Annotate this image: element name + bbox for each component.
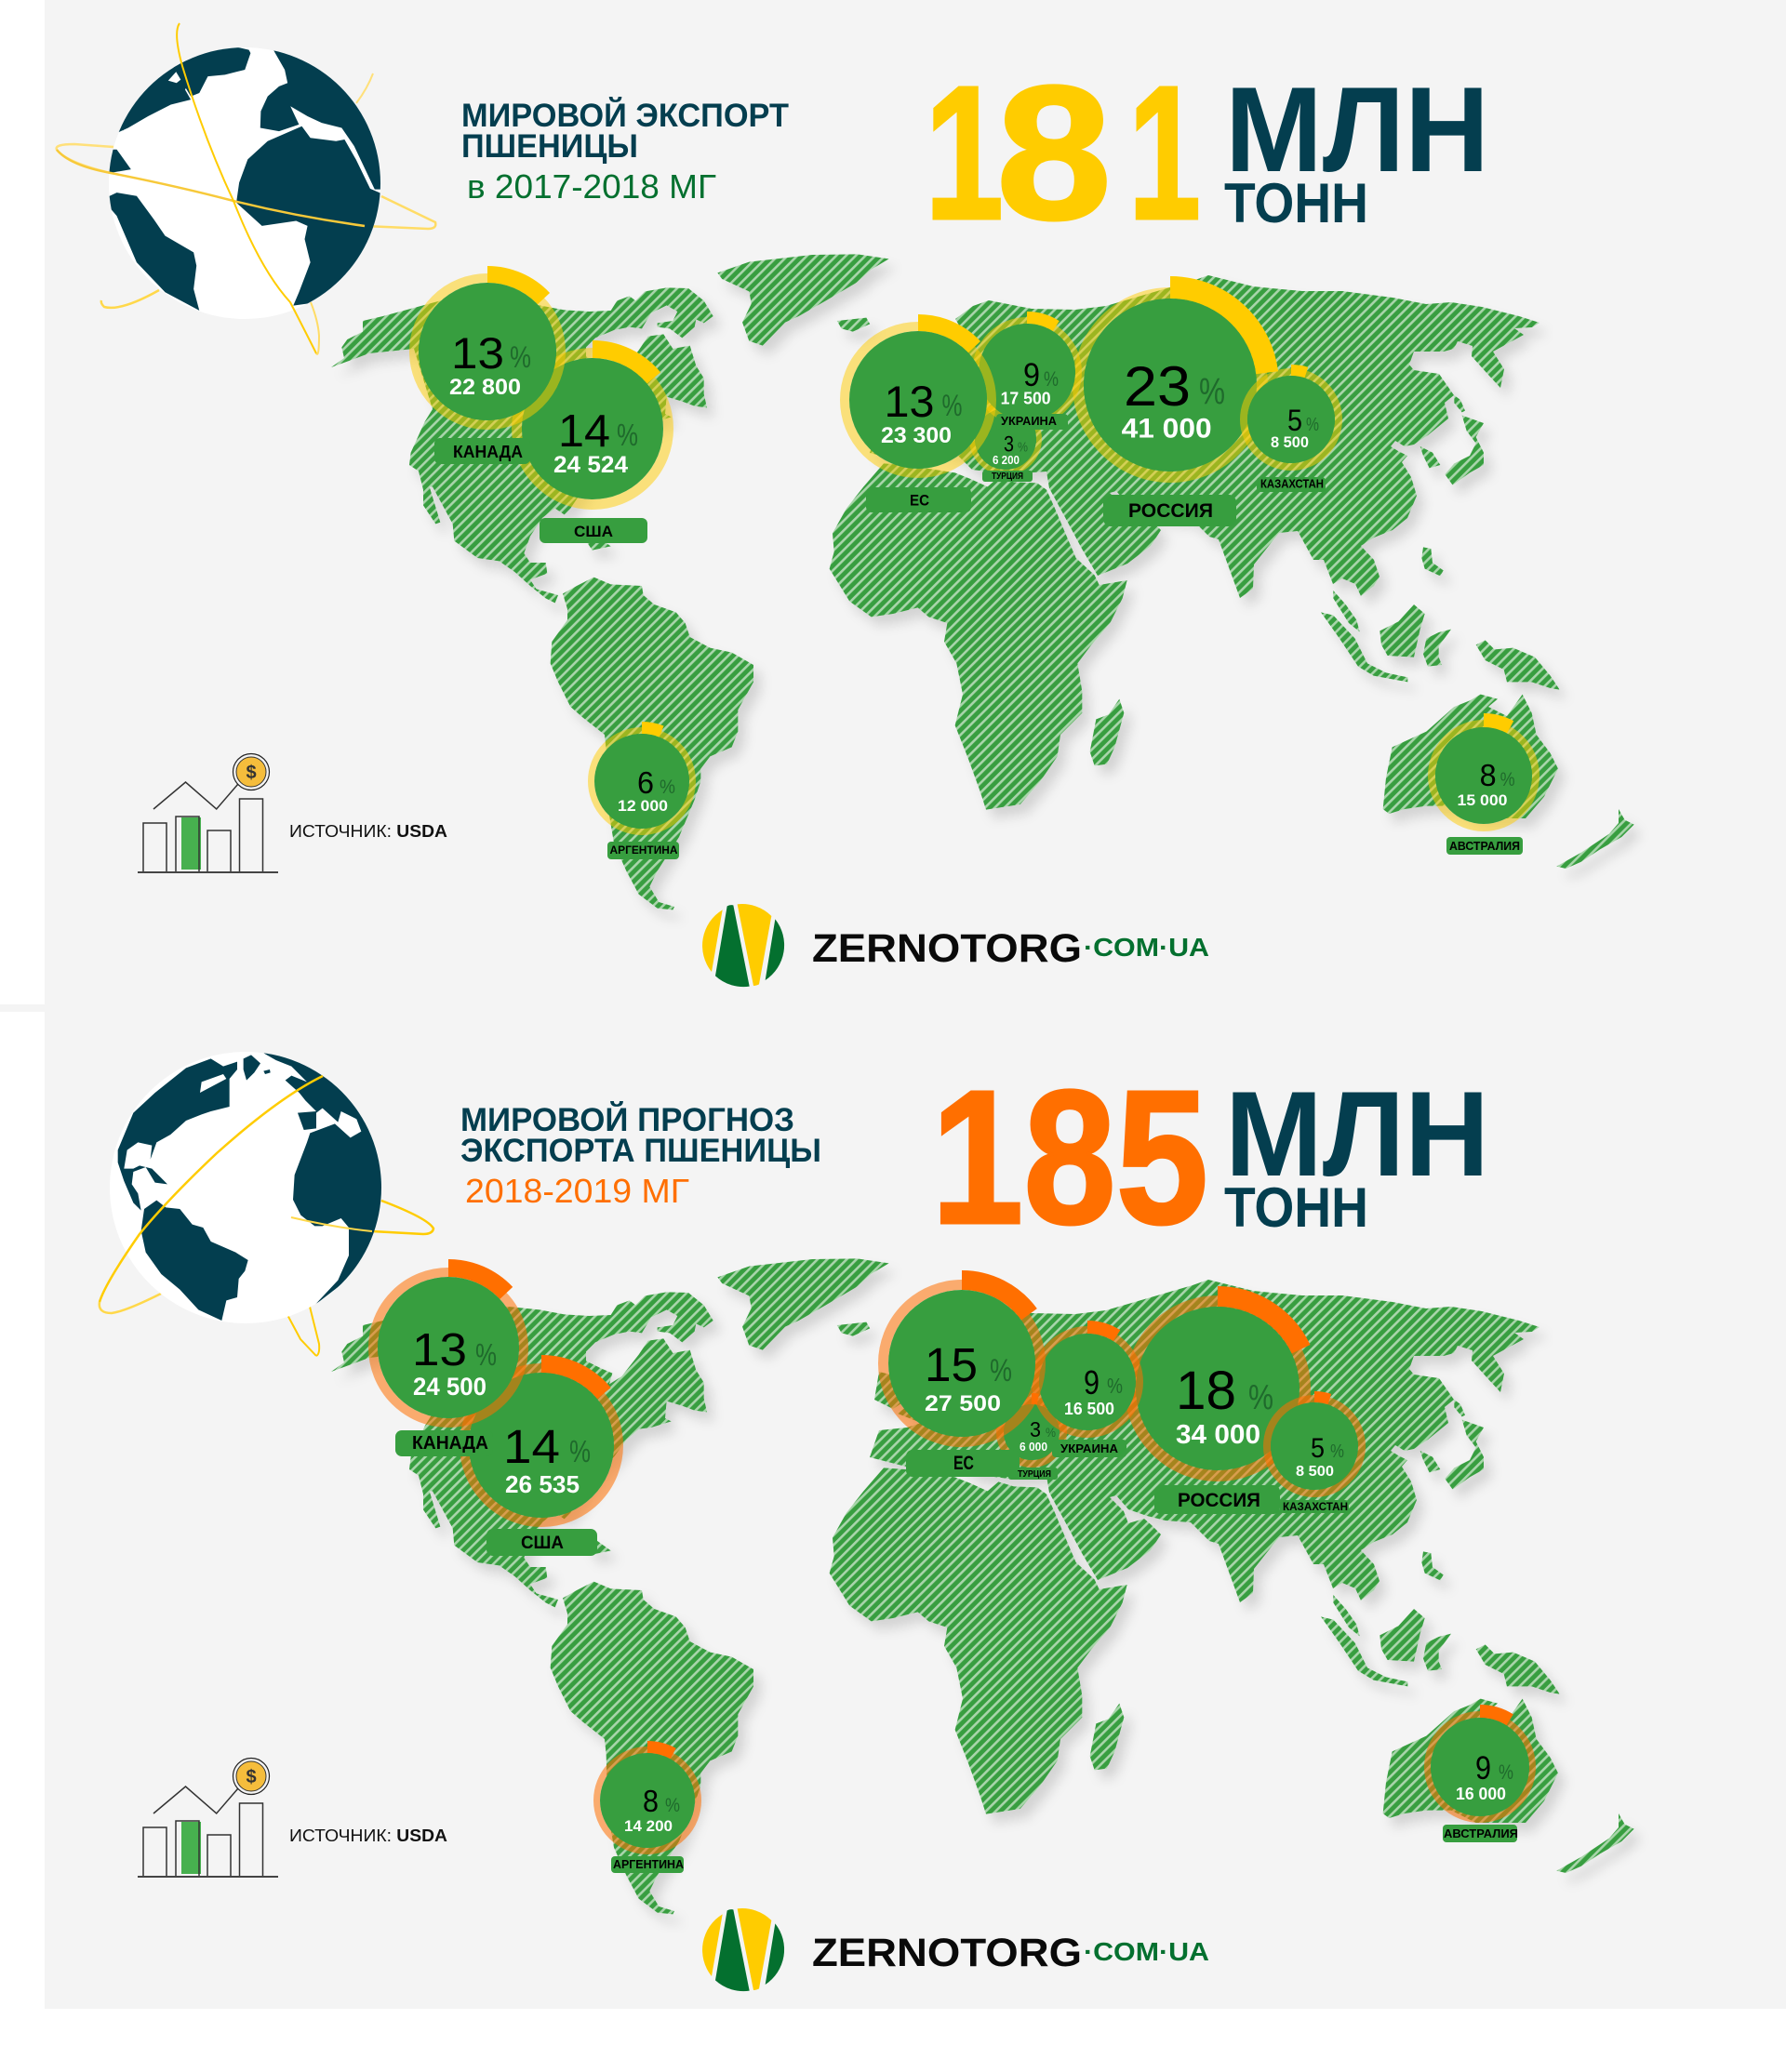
bubble: Украина 2018 — [1033, 1327, 1142, 1457]
bubble: Казахстан 2018: 8 500 — [1296, 1464, 1334, 1480]
bubble: Австралия 2018 — [1424, 1711, 1536, 1842]
headline number, top panel: МЛН — [1225, 61, 1489, 197]
bubble: Казахстан 2017: 8 500 — [1271, 433, 1309, 451]
bubble: ЕС 2017 — [841, 323, 995, 512]
bubble: Австралия 2018: % — [1499, 1760, 1513, 1784]
bubble: Турция 2017: ТУРЦИЯ — [992, 472, 1023, 482]
bubble: Турция 2017: 3 — [1004, 432, 1014, 458]
bubble: Турция 2017 — [969, 404, 1042, 482]
bubble: Австралия 2017: 15 000 — [1457, 791, 1507, 809]
title, top panel: в 2017-2018 МГ — [467, 167, 716, 206]
bubble: Аргентина 2018 — [593, 1747, 701, 1873]
bubble: Украина 2018: 9 — [1084, 1363, 1100, 1401]
bubble: Канада 2018: % — [475, 1337, 497, 1372]
bubble: Россия 2017: 23 — [1124, 355, 1191, 418]
bubble: Австралия 2017 — [1429, 720, 1539, 855]
bubble: Украина 2018: 16 500 — [1064, 1400, 1114, 1418]
headline number, top panel: ТОНН — [1224, 172, 1368, 234]
bubble: Казахстан 2018 — [1265, 1397, 1364, 1513]
bubble: Россия 2017: % — [1199, 372, 1225, 413]
logo wordmark — [812, 926, 1209, 971]
headline number, bottom panel: 185 — [931, 1051, 1208, 1264]
headline number, top panel — [925, 46, 1489, 259]
headline number, top panel: 1 — [1128, 46, 1201, 259]
bubble: Украина 2017: % — [1044, 367, 1059, 391]
bubble: США 2017 — [513, 350, 672, 543]
title, top panel — [461, 97, 789, 206]
source note, bottom panel: ИСТОЧНИК: USDA — [289, 1826, 447, 1845]
bubble: Казахстан 2017 — [1242, 370, 1340, 492]
bubble: Аргентина 2017 — [588, 727, 696, 859]
logo, bottom panel: ZERNOTORG — [812, 1931, 1082, 1975]
bubble: ЕС 2018: % — [990, 1353, 1012, 1388]
bubble: Украина 2017 — [973, 318, 1081, 430]
bubble: Австралия 2017: 8 — [1480, 758, 1497, 792]
bubble: Россия 2018: РОССИЯ — [1178, 1490, 1260, 1511]
label: Турция 2018: ТУРЦИЯ — [1018, 1468, 1051, 1480]
bubble: США 2017: 14 — [558, 406, 610, 457]
bubble: Канада 2018: КАНАДА — [412, 1433, 488, 1454]
bubble: Турция 2018: 3 — [1030, 1417, 1041, 1441]
bubble: США 2018: США — [521, 1534, 564, 1553]
logo, top panel — [702, 904, 1209, 987]
bubble: ЕС 2018 — [878, 1280, 1046, 1477]
bubble: Аргентина 2017: % — [660, 777, 675, 798]
bubble: Аргентина 2017: АРГЕНТИНА — [610, 843, 678, 857]
bubble: Украина 2017: 9 — [1023, 357, 1040, 393]
bubble: Канада 2017: 22 800 — [449, 375, 521, 400]
title, top panel: МИРОВОЙ ЭКСПОРТ — [461, 97, 789, 134]
icon: chart with coin, top panel — [138, 753, 278, 873]
bubble: США 2018: % — [569, 1434, 591, 1468]
bubble: США 2018: 26 535 — [505, 1470, 580, 1498]
bubble: Аргентина 2017: 12 000 — [618, 797, 668, 815]
headline number, top panel: 1 — [925, 46, 1004, 259]
bubble: Украина 2018: % — [1107, 1374, 1123, 1398]
bubble: Аргентина 2018: 14 200 — [624, 1817, 673, 1835]
bubble: ЕС 2018: 15 — [925, 1338, 978, 1391]
title, bottom panel: 2018-2019 МГ — [465, 1172, 689, 1210]
bubble: Казахстан 2018: 5 — [1311, 1433, 1325, 1464]
bubble: Аргентина 2018: 8 — [643, 1784, 659, 1818]
bubble: Канада 2017: КАНАДА — [453, 443, 523, 461]
title, bottom panel — [460, 1101, 821, 1210]
bubble: США 2017: % — [617, 418, 638, 452]
bubble: Казахстан 2017: 5 — [1287, 404, 1302, 437]
title, bottom panel: МИРОВОЙ ПРОГНОЗ — [460, 1101, 794, 1138]
bubble: США 2018 — [460, 1363, 623, 1556]
bubble: Россия 2018: 18 — [1176, 1361, 1236, 1421]
bubble: Казахстан 2018: % — [1330, 1441, 1344, 1462]
world map, bottom panel — [316, 1246, 1656, 1934]
bubble: Казахстан 2017: КАЗАХСТАН — [1260, 478, 1324, 491]
bubble: Аргентина 2018: % — [665, 1795, 680, 1816]
logo wordmark: ·COM·UA — [1084, 933, 1209, 962]
logo, bottom panel: ·COM·UA — [1084, 1937, 1209, 1966]
bubble: США 2017: США — [574, 523, 613, 540]
bubble: ЕС 2018: 27 500 — [925, 1391, 1001, 1416]
bubble: Канада 2018: 24 500 — [413, 1373, 486, 1401]
bubble: ЕС 2018: ЕС — [953, 1453, 974, 1474]
bubble: Россия 2018: % — [1248, 1378, 1273, 1417]
bubble: Россия 2017: РОССИЯ — [1128, 500, 1213, 522]
headline number, bottom panel: ТОНН — [1224, 1176, 1368, 1239]
bubble: ЕС 2017: ЕС — [910, 491, 929, 510]
bubble: Россия 2018: 34 000 — [1176, 1420, 1260, 1450]
bubble: Австралия 2017: % — [1500, 769, 1515, 790]
globe, top panel — [57, 23, 435, 354]
bubble: Россия 2017: 41 000 — [1122, 414, 1212, 445]
bubble: Австралия 2017: АВСТРАЛИЯ — [1449, 840, 1520, 853]
icon: chart with coin, bottom panel — [138, 1758, 278, 1878]
headline number, top panel: 8 — [996, 46, 1112, 259]
bubble: США 2018: 14 — [503, 1420, 560, 1473]
world map, top panel — [316, 242, 1656, 930]
bubble: Россия 2018 — [1126, 1296, 1310, 1514]
icon: chart with coin, top panel: $ — [246, 763, 257, 783]
bubble: Турция 2017: 6 200 — [993, 454, 1020, 467]
bubble: Украина 2017: УКРАИНА — [1001, 415, 1057, 428]
bubble: ЕС 2017: 23 300 — [881, 423, 952, 448]
bubble: Австралия 2018: 16 000 — [1456, 1785, 1506, 1803]
bubble: Канада 2017: 13 — [451, 328, 504, 378]
bubble: Аргентина 2017: 6 — [637, 765, 654, 800]
bubble: Канада 2018: 13 — [412, 1325, 467, 1375]
logo wordmark: ZERNOTORG — [812, 926, 1082, 971]
bubble: Аргентина 2018: АРГЕНТИНА — [613, 1858, 684, 1871]
bubble: Австралия 2018: АВСТРАЛИЯ — [1444, 1827, 1518, 1840]
bubble: Турция 2017: % — [1018, 439, 1028, 456]
headline number, bottom panel: МЛН — [1225, 1066, 1489, 1202]
logo mark — [702, 904, 784, 987]
bubble: ЕС 2017: % — [941, 389, 962, 422]
headline number, bottom panel — [931, 1051, 1489, 1264]
bubble: Турция 2018 — [998, 1399, 1065, 1466]
bubble: Канада 2017: % — [510, 340, 531, 374]
bubble: Россия 2017 — [1073, 287, 1268, 526]
bubble: Канада 2017 — [410, 274, 565, 464]
bubble: Украина 2017: 17 500 — [1001, 389, 1051, 407]
bubble: Украина 2018: УКРАИНА — [1060, 1441, 1119, 1455]
title, top panel: ПШЕНИЦЫ — [461, 128, 638, 165]
logo, bottom panel — [702, 1908, 1209, 1991]
bubble: ЕС 2017: 13 — [884, 377, 934, 426]
bubble: Турция 2018: % — [1046, 1425, 1056, 1440]
bubble: Турция 2018: 6 000 — [1020, 1440, 1047, 1454]
bubble: США 2017: 24 524 — [553, 452, 628, 478]
bubble: Канада 2018 — [368, 1268, 528, 1456]
bubble: Казахстан 2017: % — [1306, 415, 1319, 435]
source note, top panel: ИСТОЧНИК: USDA — [289, 822, 447, 841]
title, bottom panel: ЭКСПОРТА ПШЕНИЦЫ — [460, 1133, 821, 1169]
bubble: Казахстан 2018: КАЗАХСТАН — [1283, 1500, 1348, 1513]
globe, bottom panel — [100, 1051, 433, 1356]
bubble: Австралия 2018: 9 — [1475, 1750, 1491, 1786]
